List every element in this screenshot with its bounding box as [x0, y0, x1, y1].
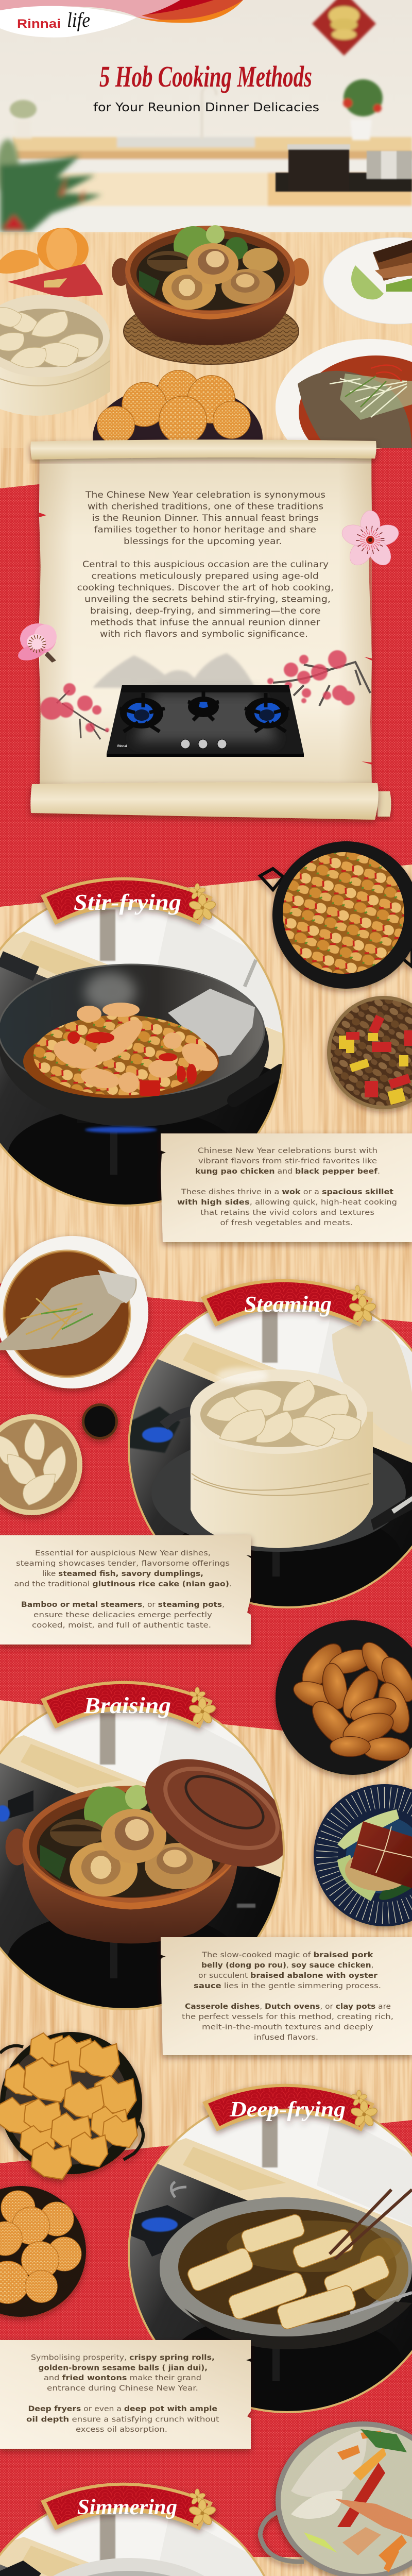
steaming text card: Essential for auspicious New Year dishes, — [35, 1549, 211, 1557]
gold photo ring — [0, 888, 284, 1206]
intro text: unveiling the secrets behind stir-frying, steaming, — [84, 595, 331, 604]
straw mat — [123, 313, 299, 365]
stir-frying text card: These dishes thrive in a wok or a spacious skillet — [181, 1188, 393, 1196]
gas hob product — [107, 685, 304, 757]
intro text: with rich flavors and symbolic significance. — [100, 629, 308, 639]
burner left — [119, 693, 165, 732]
steamed fish plate — [276, 339, 412, 448]
section 4: deep-frying — [0, 2032, 412, 2449]
logo script: life — [67, 8, 90, 31]
dumpling basket — [0, 1414, 82, 1515]
bamboo lid — [332, 1320, 412, 1448]
kung pao chicken pan — [260, 841, 412, 989]
intro text: methods that infuse the annual reunion dinner — [91, 617, 320, 628]
cherry blossom branch left — [40, 683, 109, 739]
steamed fish plate — [0, 1236, 148, 1388]
intro text: blessings for the upcoming year. — [124, 536, 282, 546]
table top — [0, 232, 412, 448]
round photo: wok stir-fry — [0, 907, 283, 1205]
braising text card: Casserole dishes , Dutch ovens , or clay pots are — [185, 2003, 391, 2011]
stir-frying text card: Chinese New Year celebrations burst with — [198, 1147, 377, 1155]
spring rolls — [186, 2213, 391, 2330]
braising text card — [161, 1937, 412, 2055]
section 1: stir-frying — [0, 841, 412, 1242]
scroll paper — [39, 453, 372, 788]
deep-frying banner: Deep-frying — [229, 2098, 346, 2122]
steaming text card: like steamed fish, savory dumplings, — [42, 1570, 203, 1578]
clay pot lid — [128, 1737, 308, 1889]
intro text: The Chinese New Year celebration is synonymous — [85, 490, 325, 500]
deep-frying text card: excess oil absorption. — [76, 2426, 167, 2434]
dumplings — [205, 1378, 363, 1452]
red envelopes — [8, 264, 103, 298]
left pine branch — [0, 139, 102, 232]
left small plant — [10, 100, 37, 139]
burner centre — [188, 691, 219, 720]
deep-frying text card: oil depth ensure a satisfying crunch without — [26, 2415, 219, 2424]
stir-frying text card: vibrant flavors from stir-fried favorites like — [198, 1157, 377, 1165]
deep-frying text card: golden-brown sesame balls ( jian dui), — [38, 2364, 208, 2372]
black pepper beef plate — [327, 996, 412, 1109]
plate of braised pork — [323, 238, 412, 324]
spatula — [168, 989, 255, 1057]
simmering banner — [41, 2483, 216, 2530]
steaming text card: and the traditional glutinous rice cake (nian gao) . — [14, 1580, 232, 1588]
right potted plant — [343, 79, 383, 140]
bamboo steamer body — [191, 1412, 373, 1548]
fried wonton pan — [0, 2032, 143, 2179]
braising banner: Braising — [83, 1693, 171, 1718]
clay pot (scaled) — [6, 1785, 256, 1943]
stir-frying banner — [41, 877, 216, 925]
gold photo ring — [0, 2494, 284, 2576]
stir-frying text card — [161, 1133, 412, 1242]
blossom left — [16, 623, 57, 664]
steam — [216, 1367, 268, 1384]
burner right — [245, 693, 289, 732]
intro text: cooking techniques. Discover the art of hob cooking, — [77, 583, 334, 592]
blue flame glimpse — [85, 1127, 157, 1133]
stir-fried chicken mound — [23, 1041, 219, 1098]
simmering banner: Simmering — [77, 2496, 177, 2519]
stove and pots — [276, 144, 412, 192]
braising text card: The slow-cooked magic of braised pork — [201, 1951, 373, 1959]
hob logo — [237, 1904, 255, 1908]
wok — [171, 2182, 186, 2197]
header kitchen scene — [0, 0, 412, 232]
soy sauce wings plate — [276, 1620, 412, 1775]
red door ornament — [312, 0, 376, 56]
hob brand: Rinnai — [117, 745, 127, 748]
wok — [0, 1025, 269, 1127]
stir-frying text card: that retains the vivid colors and textures — [200, 1209, 374, 1217]
steaming text card: Bamboo or metal steamers , or steaming pots , — [21, 1601, 225, 1609]
round photo: bamboo steamer — [126, 1288, 412, 1613]
steam — [84, 972, 136, 1011]
braising text card: or succulent braised abalone with oyster — [198, 1972, 378, 1980]
header table objects — [0, 225, 412, 448]
steaming text card: cooked, moist, and full of authentic taste. — [32, 1621, 211, 1630]
burner with flame — [8, 1790, 33, 1819]
steaming text card: steaming showcases tender, flavorsome offerings — [16, 1560, 230, 1568]
intro scroll — [16, 439, 401, 820]
gold photo ring — [129, 1290, 412, 1607]
gold photo ring — [0, 1692, 284, 2009]
deep-frying text card: Symbolising prosperity, crispy spring rolls, — [31, 2353, 215, 2362]
bamboo steamer with dumplings — [0, 295, 110, 416]
bottom roller — [377, 791, 391, 817]
braising text card: sauce lies in the gentle simmering process. — [194, 1982, 381, 1990]
gold photo ring — [129, 2095, 412, 2412]
braising banner — [41, 1681, 216, 1728]
intro text: creations meticulously prepared using age-old — [92, 571, 319, 581]
soy sauce dish — [82, 1403, 118, 1439]
logo wordmark: Rinnai — [17, 17, 61, 31]
steaming text card: ensure these delicacies emerge perfectly — [33, 1611, 212, 1619]
intro text: braising, deep-frying, and simmering—the core — [90, 606, 320, 616]
sesame balls on dark plate — [93, 370, 263, 440]
intro text: Central to this auspicious occasion are the culinary — [82, 560, 329, 569]
braising text card: the perfect vessels for this method, creating rich, — [182, 2013, 393, 2021]
section 3: braising — [0, 1620, 412, 2055]
stir-frying text card: with high sides , allowing quick, high-heat cooking — [177, 1198, 397, 1207]
cherry blossom branch right — [267, 650, 370, 706]
round photo: herbal soup pot — [0, 2492, 294, 2576]
counter, sink and second counter — [0, 86, 412, 232]
pot rim — [18, 2558, 239, 2576]
sesame balls plate — [0, 2186, 86, 2317]
intro text: families together to honor heritage and share — [94, 524, 316, 535]
deep-frying text card — [0, 2340, 251, 2449]
dong po pork plate — [314, 1784, 412, 1926]
title: 5 Hob Cooking Methods — [99, 60, 312, 93]
ink mountains — [93, 653, 255, 688]
wok under steamer — [151, 1433, 406, 1552]
section 2: steaming — [0, 1236, 412, 1645]
subtitle: for Your Reunion Dinner Delicacies — [93, 101, 319, 114]
top roller — [30, 439, 376, 460]
braising text card: belly (dong po rou) , soy sauce chicken , — [201, 1961, 374, 1970]
control knobs — [181, 739, 227, 749]
wok handle — [234, 1071, 281, 1100]
stir-frying text card: of fresh vegetables and meats. — [220, 1219, 353, 1227]
blossom right — [339, 511, 401, 569]
steaming banner: Steaming — [244, 1292, 332, 1317]
flame and burner — [129, 1406, 180, 1453]
braising text card: melt-in-the-mouth textures and deeply — [202, 2023, 373, 2031]
deep-frying text card: entrance during Chinese New Year. — [47, 2384, 198, 2393]
stir-frying banner: Stir-frying — [74, 890, 181, 915]
burner flame — [0, 2561, 41, 2576]
clay pot of braised abalone — [112, 225, 309, 345]
intro text: with cherished traditions, one of these traditions — [88, 502, 323, 511]
seafood hot pot — [260, 2421, 412, 2576]
intro text — [77, 490, 334, 639]
top logo swoosh — [0, 0, 243, 38]
section 5: simmering — [0, 2421, 412, 2576]
deep-frying text card: and fried wontons make their grand — [44, 2374, 201, 2382]
burner flame — [131, 2205, 198, 2257]
round photo: wok deep-frying — [126, 2093, 412, 2417]
deep-frying text card: Deep fryers or even a deep pot with ample — [28, 2405, 217, 2413]
braising text card: infused flavors. — [254, 2033, 318, 2042]
stir-frying text card: kung pao chicken and black pepper beef . — [195, 1167, 380, 1176]
chopsticks — [330, 2190, 412, 2259]
deep-frying banner — [202, 2084, 378, 2131]
steaming text card — [0, 1535, 251, 1645]
mandarin orange — [0, 228, 89, 274]
intro text: is the Reunion Dinner. This annual feast brings — [92, 513, 319, 523]
steaming banner — [201, 1279, 376, 1327]
round photo: clay pot braising — [0, 1690, 308, 2014]
